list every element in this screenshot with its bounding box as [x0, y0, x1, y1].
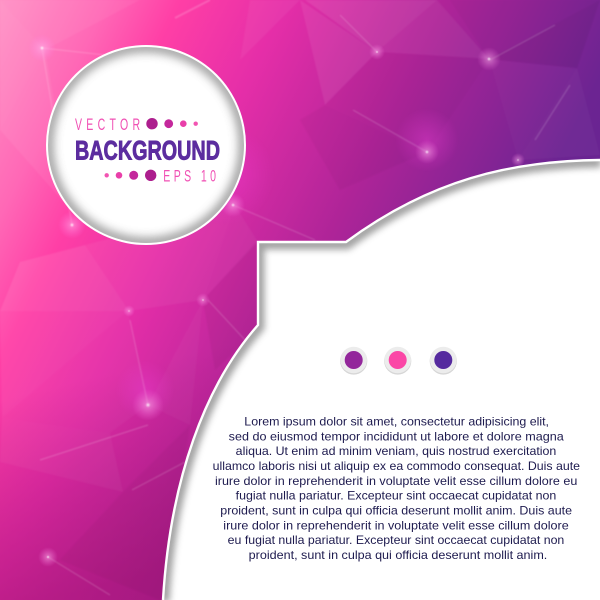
text block: lorem ipsum body: eu fugiat nulla pariatur. Excepteur sint occaecat cupidatat non	[228, 533, 564, 547]
text: EPS 10: EPS 10	[163, 166, 216, 185]
dot: indigo	[430, 347, 457, 375]
text block: lorem ipsum body	[213, 414, 580, 562]
badge: circular title seal	[46, 45, 246, 245]
panel: white content area with curved edge	[163, 160, 600, 600]
dot: pink	[384, 347, 411, 375]
dot: purple	[340, 347, 367, 375]
text block: lorem ipsum body: Lorem ipsum dolor sit amet, consectetur adipisicing elit,	[244, 414, 549, 428]
text block: lorem ipsum body: irure dolor in reprehenderit in voluptate velit esse cillum dolore eu	[215, 474, 577, 488]
text block: lorem ipsum body: fugiat nulla pariatur. Excepteur sint occaecat cupidatat non	[236, 489, 556, 503]
text: VECTOR: VECTOR	[75, 114, 140, 134]
text block: lorem ipsum body: proident, sunt in culpa qui officia deserunt mollit anim.	[249, 548, 547, 562]
text block: lorem ipsum body: irure dolor in reprehenderit in voluptate velit esse cillum dolore	[223, 518, 569, 532]
text: BACKGROUND: BACKGROUND	[75, 135, 220, 165]
text block: lorem ipsum body: aliqua. Ut enim ad minim veniam, quis nostrud exercitation	[236, 444, 556, 458]
colour dots	[340, 347, 457, 375]
text block: lorem ipsum body: ullamco laboris nisi ut aliquip ex ea commodo consequat. Duis aute	[213, 459, 580, 473]
text block: lorem ipsum body: proident, sunt in culpa qui officia deserunt mollit anim. Duis aute	[220, 504, 572, 518]
text block: lorem ipsum body: sed do eiusmod tempor incididunt ut labore et dolore magna	[229, 429, 564, 443]
top dot row	[146, 118, 198, 129]
bottom dot row	[104, 170, 156, 181]
